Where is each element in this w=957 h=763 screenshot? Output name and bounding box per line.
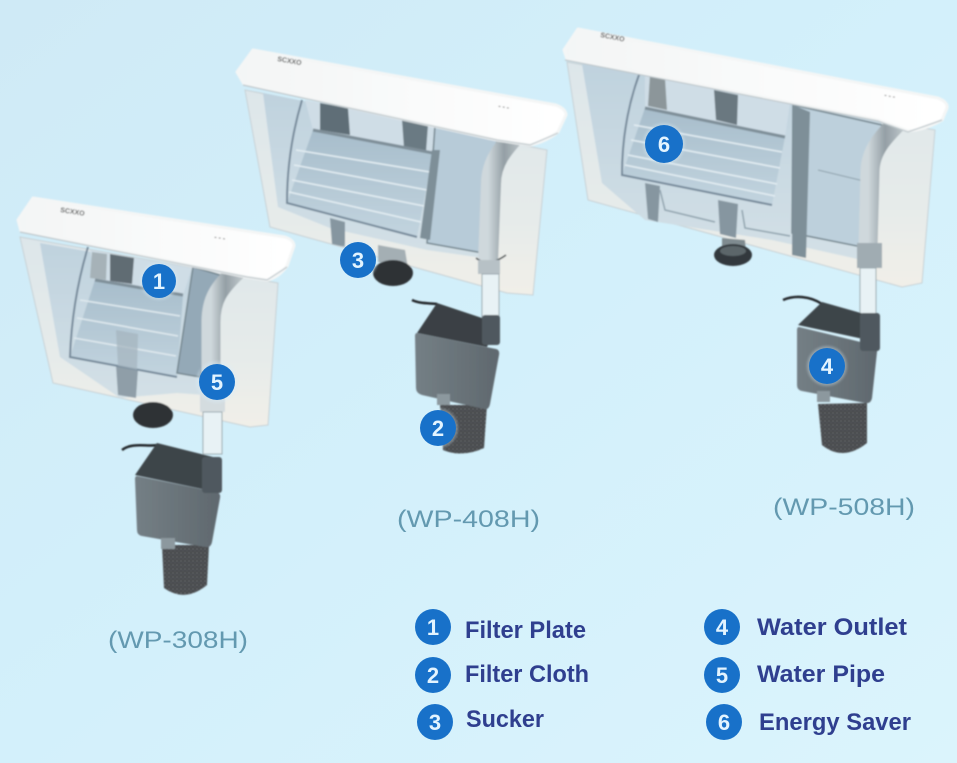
- badge 6 on energy saver: [643, 123, 685, 165]
- sucker WP-508H: [714, 238, 752, 266]
- legend item 6: [706, 704, 911, 740]
- right chamber WP-408H: [420, 125, 497, 253]
- badge 3 on sucker: [338, 240, 378, 280]
- legend item 6: 6: [718, 710, 730, 735]
- tank body WP-308H: [20, 237, 278, 427]
- lid WP-508H: SCXXO: [600, 32, 626, 44]
- legend item 2: 2: [427, 663, 439, 688]
- badge 1 on filter plate: 1: [153, 269, 165, 294]
- filter plate WP-408H: [287, 100, 435, 247]
- badge 5 on water pipe: [196, 361, 238, 403]
- legend item 1: Filter Plate: [465, 617, 586, 644]
- lid WP-508H: - - -: [884, 92, 896, 101]
- lid WP-408H: SCXXO: [277, 56, 303, 67]
- legend item 2: Filter Cloth: [465, 661, 589, 688]
- legend item 5: [704, 657, 885, 693]
- water pipe WP-308H: [200, 268, 240, 454]
- badge 3 on sucker: 3: [352, 248, 364, 273]
- pump WP-508H: [783, 297, 880, 453]
- legend item 6: Energy Saver: [759, 709, 911, 736]
- badge 5 on water pipe: 5: [211, 370, 223, 395]
- legend item 4: [704, 609, 907, 645]
- badge 4 on water outlet: 4: [821, 354, 834, 379]
- rear filter cloth WP-508H: [582, 64, 882, 260]
- lid WP-408H: [237, 50, 566, 145]
- lid WP-308H: - - -: [214, 234, 226, 243]
- filter unit: WP-308H: [18, 198, 294, 595]
- legend item 4: 4: [716, 615, 729, 640]
- legend item 5: 5: [716, 663, 728, 688]
- badge 2 on filter cloth: [418, 408, 458, 448]
- legend item 3: 3: [429, 710, 441, 735]
- filter unit: WP-508H: [564, 29, 947, 453]
- sucker WP-408H: [373, 245, 413, 286]
- tank body WP-408H: [245, 90, 547, 295]
- lid WP-308H: SCXXO: [60, 207, 86, 218]
- filter plate WP-508H: [622, 72, 790, 238]
- filter unit: WP-408H: [237, 50, 566, 454]
- legend item 3: [417, 704, 544, 740]
- rear filter cloth WP-308H: [40, 243, 222, 398]
- badge 1 on filter plate: [140, 262, 178, 300]
- badge 4 on water outlet: [807, 346, 847, 386]
- model label WP-508H: (WP-508H): [773, 494, 915, 521]
- right chamber WP-508H: [792, 105, 882, 258]
- tank body WP-508H: [567, 62, 935, 287]
- lid WP-508H: [564, 29, 947, 132]
- legend item 2: [415, 657, 589, 693]
- pump WP-308H: [122, 443, 222, 595]
- right chamber WP-308H: [177, 267, 220, 377]
- rear filter cloth WP-408H: [263, 93, 497, 258]
- sucker WP-308H: [133, 402, 173, 428]
- legend item 5: Water Pipe: [757, 661, 885, 688]
- badge 2 on filter cloth: 2: [432, 416, 444, 441]
- legend item 1: [415, 609, 586, 645]
- water pipe WP-408H: [476, 130, 520, 318]
- model label WP-308H: (WP-308H): [108, 627, 248, 654]
- lid WP-408H: - - -: [498, 103, 510, 112]
- pump WP-408H: [412, 300, 500, 454]
- legend item 4: Water Outlet: [757, 614, 907, 641]
- filter plate WP-308H: [70, 247, 192, 398]
- lid WP-308H: [18, 198, 294, 280]
- model label WP-408H: (WP-408H): [397, 506, 540, 533]
- legend item 1: 1: [427, 615, 439, 640]
- water pipe WP-508H: [857, 118, 902, 314]
- badge 6 on energy saver: 6: [658, 132, 670, 157]
- legend item 3: Sucker: [466, 706, 544, 733]
- legend: [415, 609, 911, 740]
